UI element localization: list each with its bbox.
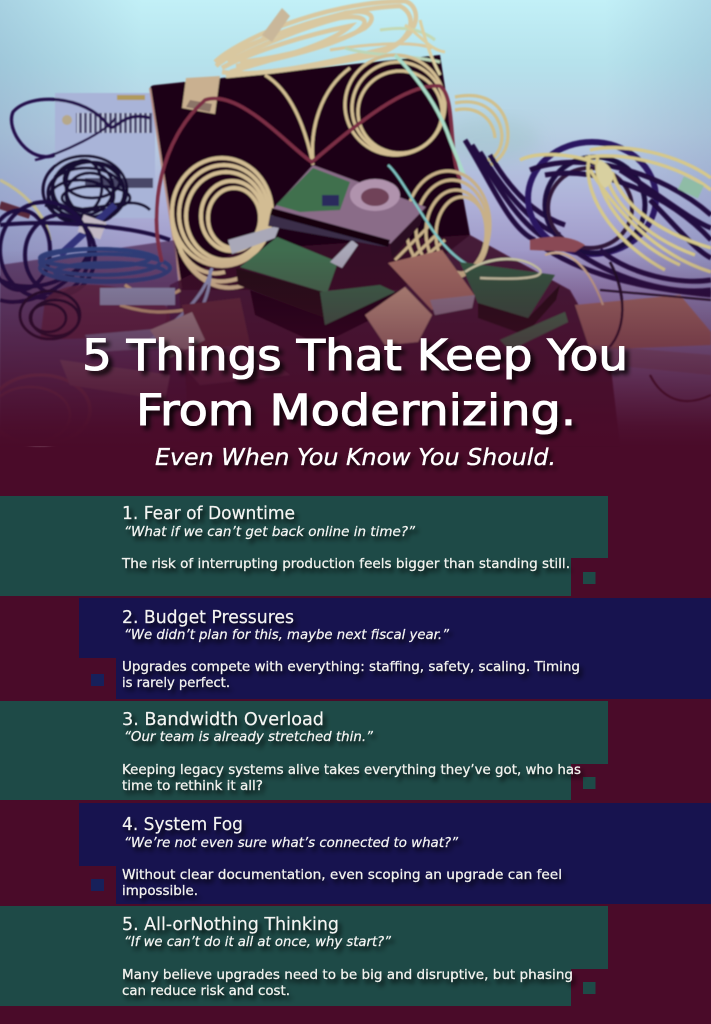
panel 4: system fog: “We’re not even sure what’s connected to what?” (124, 835, 459, 851)
panel 5: all-or-nothing thinking: “If we can’t do it all at once, why start?” (124, 934, 392, 950)
left dark cables (11, 99, 150, 160)
panel 3: bandwidth overload: Keeping legacy systems alive takes everything they’ve got, who has (122, 762, 581, 778)
panel 3: bandwidth overload: “Our team is already stretched thin.” (124, 729, 374, 745)
panel 2: budget pressures: Upgrades compete with everything: staffing, safety, scaling. Timing (122, 659, 580, 675)
panel 1: fear of downtime: 1. Fear of Downtime (122, 504, 295, 524)
panel 2: budget pressures (79, 598, 711, 699)
title (82, 331, 628, 436)
dark mound below the pile (150, 235, 620, 445)
panel 3: bandwidth overload: 3. Bandwidth Overload (122, 710, 324, 730)
right beige loops (455, 96, 508, 165)
blue-gray cable (150, 268, 212, 345)
panel 1: fear of downtime: “What if we can’t get back online in time?” (124, 524, 416, 540)
panel 3: bandwidth overload: time to rethink it all? (122, 778, 263, 794)
title: 5 Things That Keep You (82, 331, 628, 381)
title: From Modernizing. (136, 386, 576, 436)
beige left coil (172, 158, 272, 288)
light green cable (395, 55, 464, 175)
panel 5: all-or-nothing thinking: 5. All-orNothing Thinking (122, 915, 339, 935)
black laptop panel (150, 55, 470, 290)
panel 5: all-or-nothing thinking: Many believe upgrades need to be big and disruptive, but phasing (122, 967, 573, 983)
right beige coils (520, 148, 711, 272)
DB9 connector (182, 76, 220, 114)
gray bar items (100, 288, 175, 305)
subtitle: Even When You Know You Should. (155, 445, 556, 471)
lower drive with green board (228, 225, 410, 345)
teal cable (388, 165, 485, 272)
panel 2: budget pressures: 2. Budget Pressures (122, 608, 294, 628)
panel 4: system fog (79, 803, 711, 904)
loop inside panel (265, 55, 445, 165)
panel 4: system fog: Without clear documentation, even scoping an upgrade can feel (122, 867, 562, 883)
tan blocks (388, 250, 475, 310)
panel 2: budget pressures: is rarely perfect. (122, 675, 230, 691)
top cable bundle (215, 1, 445, 76)
dark purple right coils (465, 140, 711, 295)
panel 5: all-or-nothing thinking (0, 906, 608, 1006)
panel 3: bandwidth overload (0, 701, 608, 800)
panel 2: budget pressures: “We didn’t plan for this, maybe next fiscal year.” (124, 627, 450, 643)
panel 1: fear of downtime (0, 496, 608, 596)
panel 4: system fog: 4. System Fog (122, 815, 243, 835)
hero photo: pile of cables and hard drives (0, 0, 711, 446)
top small connector (262, 8, 290, 42)
panel 1: fear of downtime: The risk of interrupting production feels bigger than standing still. (121, 556, 570, 572)
panel 5: all-or-nothing thinking: can reduce risk and cost. (122, 983, 290, 999)
circuit card right (460, 262, 568, 350)
top hard drive (268, 165, 426, 258)
server box (55, 93, 155, 218)
maroon cable (156, 86, 460, 262)
panel 4: system fog: impossible. (122, 883, 198, 899)
right beige coil center (406, 171, 490, 279)
